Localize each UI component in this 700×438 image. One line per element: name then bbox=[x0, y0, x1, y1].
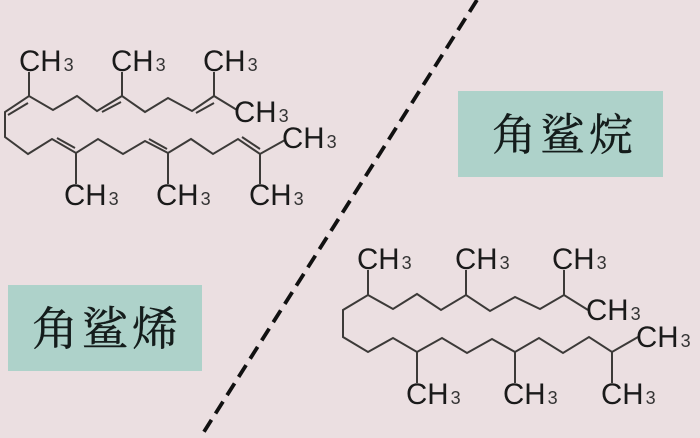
squalene methyl labels: CH3 bbox=[64, 179, 119, 212]
squalane methyl labels: CH3 bbox=[552, 243, 607, 276]
label: squalane: 角鲨烷 bbox=[492, 111, 633, 160]
panel: squalane structure bbox=[343, 243, 691, 411]
squalane methyl labels: CH3 bbox=[406, 378, 461, 411]
squalane methyl labels: CH3 bbox=[455, 243, 510, 276]
squalene methyl labels: CH3 bbox=[19, 45, 74, 78]
squalane methyl labels: CH3 bbox=[636, 321, 691, 354]
squalene methyl labels: CH3 bbox=[203, 45, 258, 78]
squalene methyl labels: CH3 bbox=[249, 179, 304, 212]
squalene carbon skeleton bbox=[5, 72, 285, 184]
squalene methyl labels: CH3 bbox=[111, 45, 166, 78]
squalane methyl labels: CH3 bbox=[357, 243, 412, 276]
squalene methyl labels bbox=[19, 45, 337, 212]
squalene methyl labels: CH3 bbox=[234, 96, 289, 129]
squalane carbon skeleton bbox=[343, 270, 638, 383]
squalane methyl labels: CH3 bbox=[503, 378, 558, 411]
dashed divider bbox=[200, 0, 477, 438]
squalane methyl labels bbox=[357, 243, 691, 411]
label: squalene: 角鲨烯 bbox=[32, 304, 178, 355]
squalane methyl labels: CH3 bbox=[586, 294, 641, 327]
label: squalane bbox=[458, 91, 663, 177]
squalane methyl labels: CH3 bbox=[601, 378, 656, 411]
squalene methyl labels: CH3 bbox=[282, 122, 337, 155]
squalene methyl labels: CH3 bbox=[156, 179, 211, 212]
label: squalene bbox=[8, 285, 202, 371]
panel: squalene structure bbox=[5, 45, 337, 212]
